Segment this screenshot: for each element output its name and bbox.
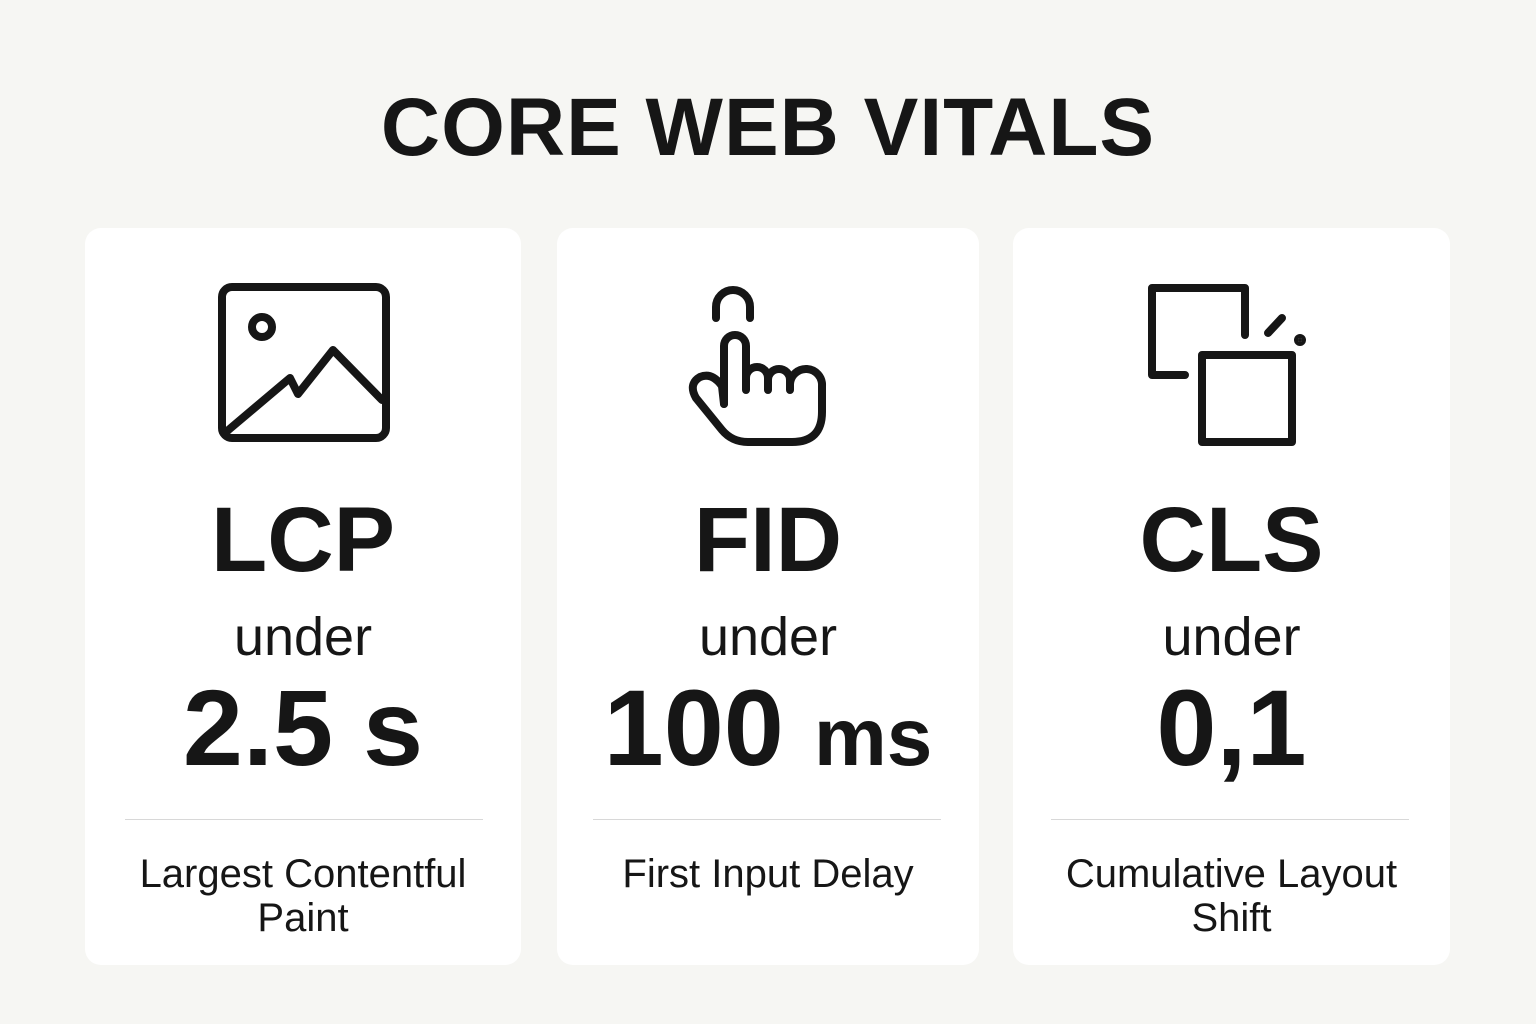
value 2.5 s: 2.5 s <box>183 667 423 788</box>
abbreviation CLS: CLS <box>1140 489 1324 591</box>
panel: CLS <box>1013 228 1450 965</box>
label under: under <box>699 607 837 667</box>
label under: under <box>1162 607 1301 667</box>
description FID: First Input Delay <box>622 852 914 896</box>
icon: pointing hand <box>693 290 822 442</box>
value 0,1: 0,1 <box>1156 667 1307 788</box>
title: CORE WEB VITALS <box>381 82 1155 173</box>
abbreviation FID: FID <box>694 489 842 591</box>
description LCP: Paint <box>257 896 349 940</box>
icon: image <box>222 287 386 438</box>
description CLS: Cumulative Layout <box>1066 852 1397 896</box>
panel: FID <box>557 228 979 965</box>
description CLS: Shift <box>1191 896 1272 940</box>
icon: layout shift squares <box>1152 288 1302 442</box>
description CLS <box>1066 852 1397 940</box>
abbreviation LCP: LCP <box>211 489 395 591</box>
label under: under <box>234 607 372 667</box>
description LCP: Largest Contentful <box>140 852 466 896</box>
description LCP <box>140 852 466 940</box>
panel: LCP <box>85 228 521 965</box>
value 100 ms: 100 ms <box>604 667 932 788</box>
